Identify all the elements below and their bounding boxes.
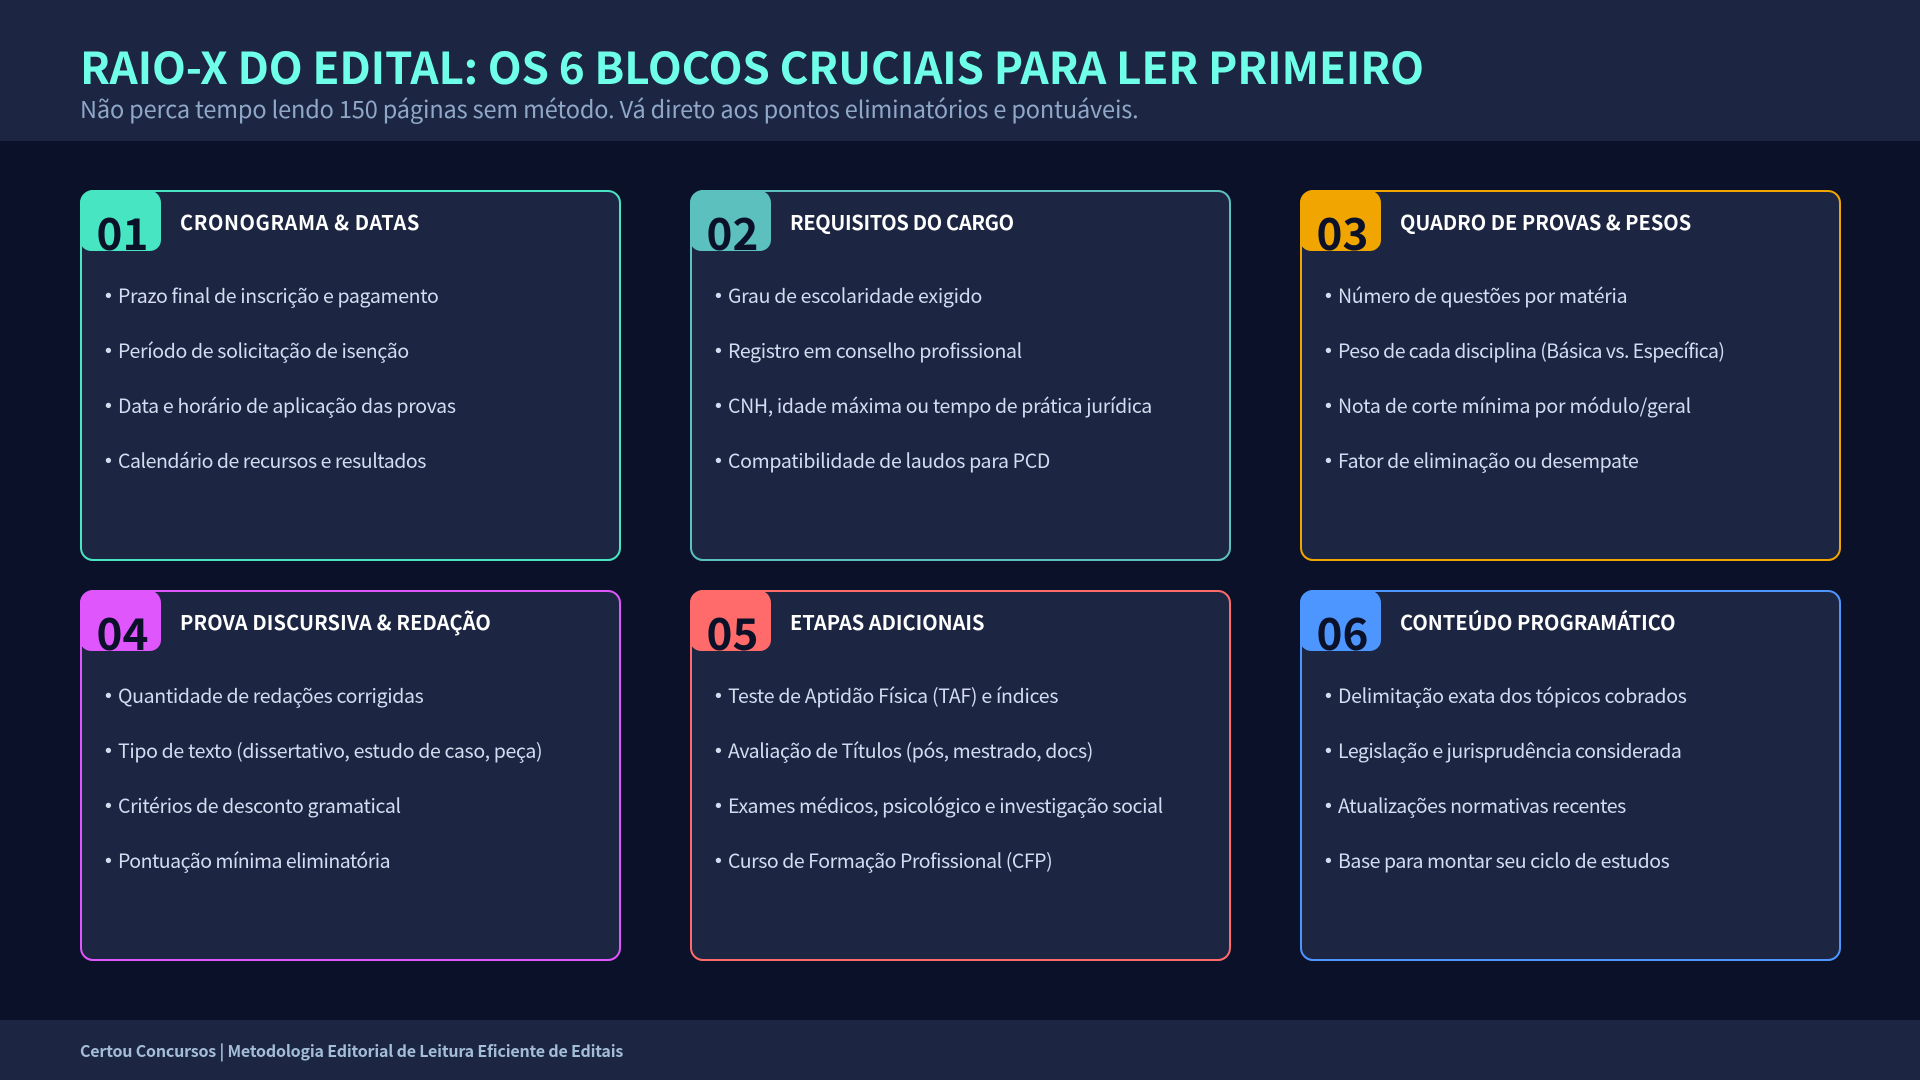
panel: requisitos <box>690 190 1231 561</box>
list: Nota de corte mínima por módulo/geral <box>1338 390 1691 419</box>
list: CNH, idade máxima ou tempo de prática jurídica <box>728 390 1152 419</box>
list <box>1325 280 1724 474</box>
badge 05 <box>690 590 771 651</box>
list: Atualizações normativas recentes <box>1338 790 1626 819</box>
list: Delimitação exata dos tópicos cobrados <box>1338 680 1687 709</box>
list: • <box>1325 795 1332 817</box>
list: • <box>715 740 722 762</box>
list: • <box>1325 285 1332 307</box>
panel: conteudo programatico <box>1300 590 1841 961</box>
subtitle: Não perca tempo lendo 150 páginas sem método. Vá direto aos pontos eliminatórios e pontuáveis. <box>80 91 1139 125</box>
badge 02 <box>690 190 771 251</box>
list: • <box>715 285 722 307</box>
list: • <box>105 340 112 362</box>
list: Avaliação de Títulos (pós, mestrado, docs) <box>728 735 1093 764</box>
list <box>715 680 1163 874</box>
badge 01 <box>80 190 161 251</box>
footer text: Certou Concursos | Metodologia Editorial de Leitura Eficiente de Editais <box>80 1038 623 1062</box>
list: • <box>105 795 112 817</box>
list: Tipo de texto (dissertativo, estudo de caso, peça) <box>118 735 542 764</box>
list <box>1325 680 1687 874</box>
list: Calendário de recursos e resultados <box>118 445 426 474</box>
title: RAIO-X DO EDITAL: OS 6 BLOCOS CRUCIAIS PARA LER PRIMEIRO <box>80 33 1424 97</box>
list: Legislação e jurisprudência considerada <box>1338 735 1681 764</box>
list: • <box>1325 685 1332 707</box>
heading: ETAPAS ADICIONAIS <box>790 607 984 636</box>
list: • <box>1325 340 1332 362</box>
list: • <box>715 850 722 872</box>
list: • <box>715 340 722 362</box>
badge 03 <box>1300 190 1381 251</box>
list: Fator de eliminação ou desempate <box>1338 445 1638 474</box>
list: Prazo final de inscrição e pagamento <box>118 280 438 309</box>
panel: etapas adicionais <box>690 590 1231 961</box>
list: Grau de escolaridade exigido <box>728 280 982 309</box>
heading: PROVA DISCURSIVA & REDAÇÃO <box>180 607 491 636</box>
list: Exames médicos, psicológico e investigação social <box>728 790 1163 819</box>
list: Registro em conselho profissional <box>728 335 1022 364</box>
list: • <box>1325 450 1332 472</box>
list: Número de questões por matéria <box>1338 280 1627 309</box>
list: • <box>715 685 722 707</box>
list: • <box>105 740 112 762</box>
list: • <box>105 850 112 872</box>
badge 04 <box>80 590 161 651</box>
list: Critérios de desconto gramatical <box>118 790 401 819</box>
list: Compatibilidade de laudos para PCD <box>728 445 1050 474</box>
list: • <box>1325 850 1332 872</box>
heading: CONTEÚDO PROGRAMÁTICO <box>1400 607 1676 636</box>
list <box>105 680 542 874</box>
panel: quadro de provas <box>1300 190 1841 561</box>
panel: cronograma <box>80 190 621 561</box>
list: Pontuação mínima eliminatória <box>118 845 390 874</box>
list <box>715 280 1152 474</box>
heading: CRONOGRAMA & DATAS <box>180 207 420 236</box>
list: Período de solicitação de isenção <box>118 335 409 364</box>
heading: REQUISITOS DO CARGO <box>790 207 1014 236</box>
list: Quantidade de redações corrigidas <box>118 680 423 709</box>
list: • <box>715 450 722 472</box>
list: • <box>105 395 112 417</box>
badge 06 <box>1300 590 1381 651</box>
list: • <box>715 795 722 817</box>
list: • <box>105 285 112 307</box>
list: • <box>105 450 112 472</box>
list: Data e horário de aplicação das provas <box>118 390 456 419</box>
list: • <box>1325 740 1332 762</box>
list: Base para montar seu ciclo de estudos <box>1338 845 1669 874</box>
list: • <box>1325 395 1332 417</box>
list: • <box>715 395 722 417</box>
footer band <box>0 1020 1920 1080</box>
panel: prova discursiva <box>80 590 621 961</box>
list: Curso de Formação Profissional (CFP) <box>728 845 1052 874</box>
list <box>105 280 456 474</box>
header band <box>0 0 1920 141</box>
list: • <box>105 685 112 707</box>
list: Teste de Aptidão Física (TAF) e índices <box>728 680 1058 709</box>
heading: QUADRO DE PROVAS & PESOS <box>1400 207 1691 236</box>
list: Peso de cada disciplina (Básica vs. Específica) <box>1338 335 1724 364</box>
